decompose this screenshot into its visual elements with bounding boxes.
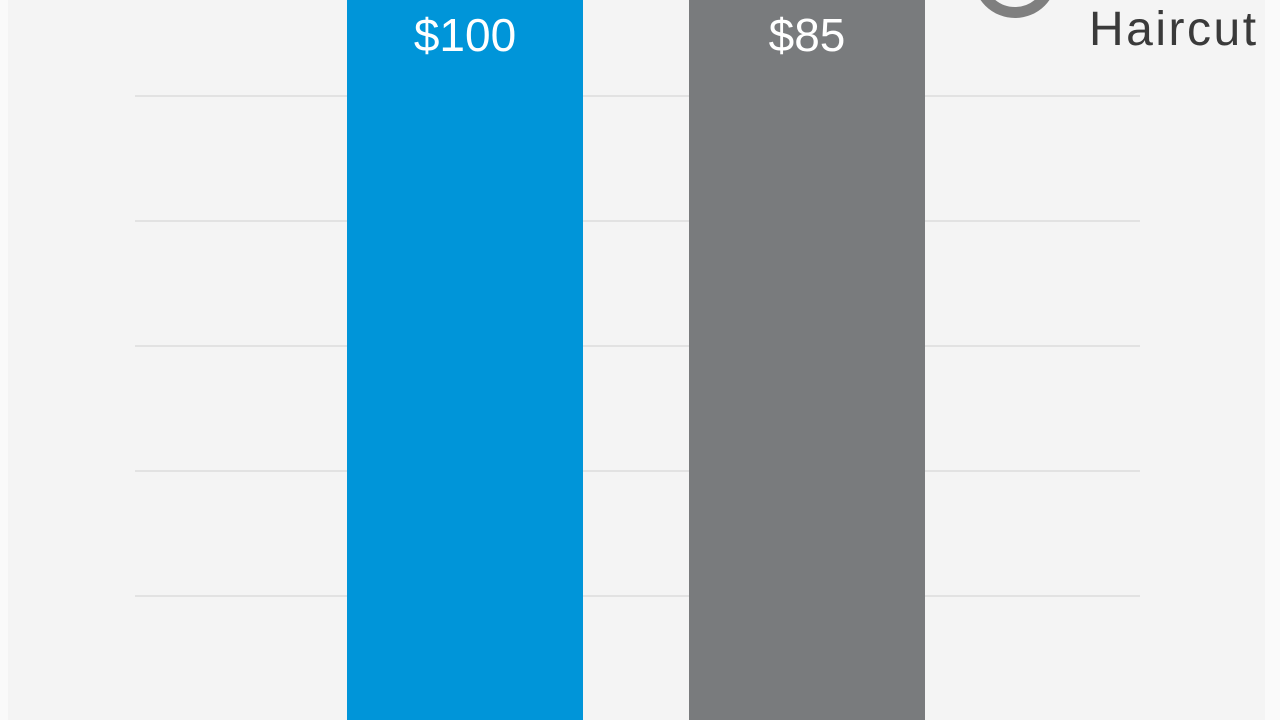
- bar: grey $85: $85: [769, 9, 845, 61]
- bar: blue $100: [347, 0, 583, 720]
- icon: grey ring: [973, 0, 1057, 18]
- legend label: Haircut: Haircut: [1089, 3, 1259, 56]
- bar: grey $85: [689, 0, 925, 720]
- bar: blue $100: $100: [414, 9, 516, 61]
